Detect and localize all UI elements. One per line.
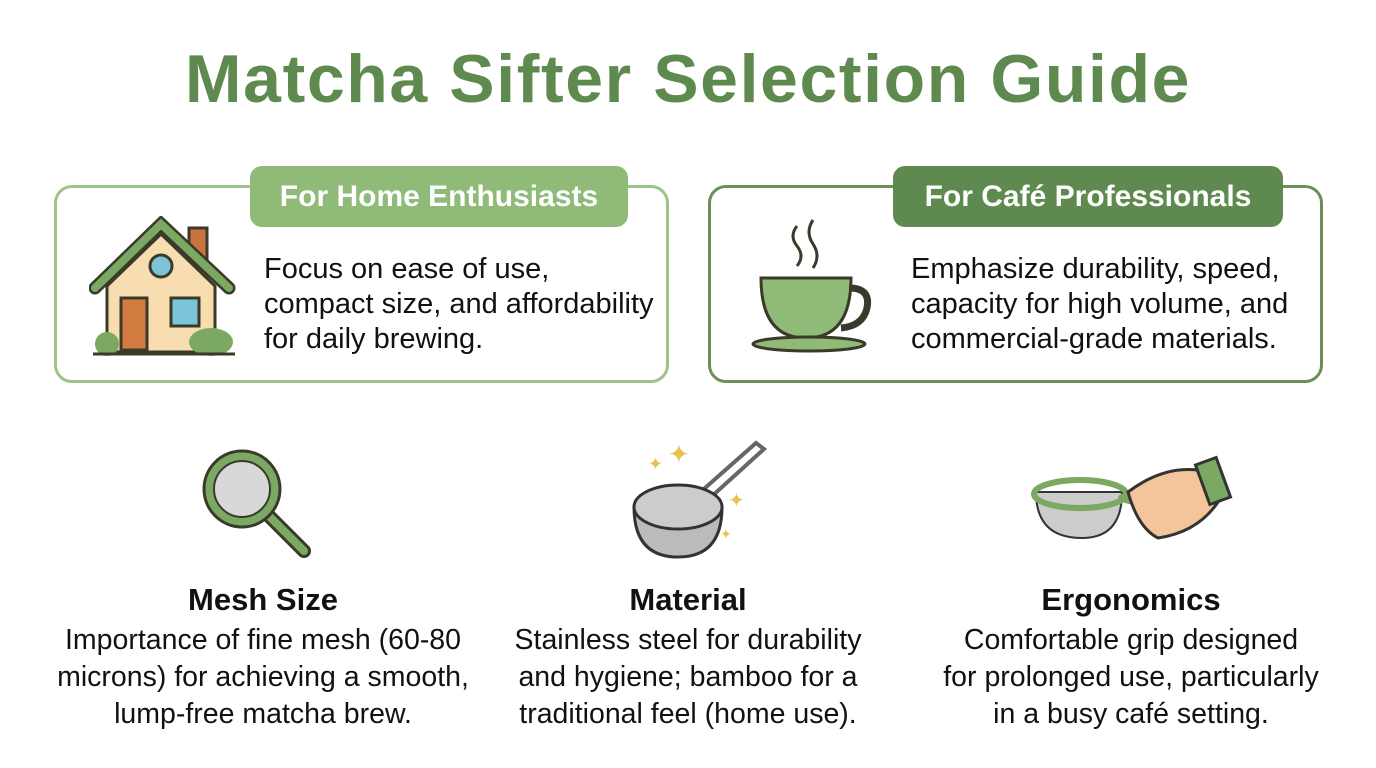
column: material: Stainless steel for durability — [515, 624, 861, 656]
icon: tea cup — [752, 219, 872, 352]
text: home description: compact size, and affordability — [264, 288, 654, 320]
column: material: traditional feel (home use). — [519, 698, 857, 730]
icon: steel strainer: ✦ — [668, 439, 690, 469]
column: mesh size — [57, 582, 469, 730]
column: material: Material — [629, 582, 747, 617]
column: mesh size: Importance of fine mesh (60-80 — [65, 624, 461, 656]
text: home description — [264, 253, 654, 355]
tab: café — [893, 166, 1283, 227]
icon: steel strainer: ✦ — [648, 454, 663, 474]
column: ergonomics — [943, 582, 1319, 730]
column: mesh size: microns) for achieving a smooth, — [57, 661, 469, 693]
column: material: and hygiene; bamboo for a — [518, 661, 858, 693]
text: café description: commercial-grade materials. — [911, 323, 1277, 355]
column: ergonomics: for prolonged use, particularly — [943, 661, 1319, 693]
text: home description: Focus on ease of use, — [264, 253, 549, 285]
icon: steel strainer: ✦ — [728, 490, 745, 512]
icon: steel strainer: ✦ — [720, 526, 732, 542]
tab: home: For Home Enthusiasts — [280, 180, 598, 213]
column: mesh size: Mesh Size — [188, 582, 338, 617]
title: Matcha Sifter Selection Guide — [185, 41, 1191, 117]
column: ergonomics: Comfortable grip designed — [964, 624, 1298, 656]
icon: hand with sifter — [1031, 456, 1232, 540]
column: ergonomics: Ergonomics — [1041, 582, 1221, 617]
column: mesh size: lump-free matcha brew. — [114, 698, 412, 730]
tab: home — [250, 166, 628, 227]
text: café description: capacity for high volume, and — [911, 288, 1288, 320]
text: café description — [911, 253, 1288, 355]
panel: café professionals — [708, 185, 1323, 383]
text: home description: for daily brewing. — [264, 323, 483, 355]
column: material — [515, 582, 862, 730]
icon: house — [89, 216, 236, 356]
tab: café: For Café Professionals — [925, 180, 1251, 213]
text: café description: Emphasize durability, speed, — [911, 253, 1280, 285]
icon: steel strainer — [632, 439, 767, 558]
column: ergonomics: in a busy café setting. — [993, 698, 1269, 730]
panel: home enthusiasts — [54, 185, 669, 383]
icon: magnifier mesh — [202, 450, 311, 558]
